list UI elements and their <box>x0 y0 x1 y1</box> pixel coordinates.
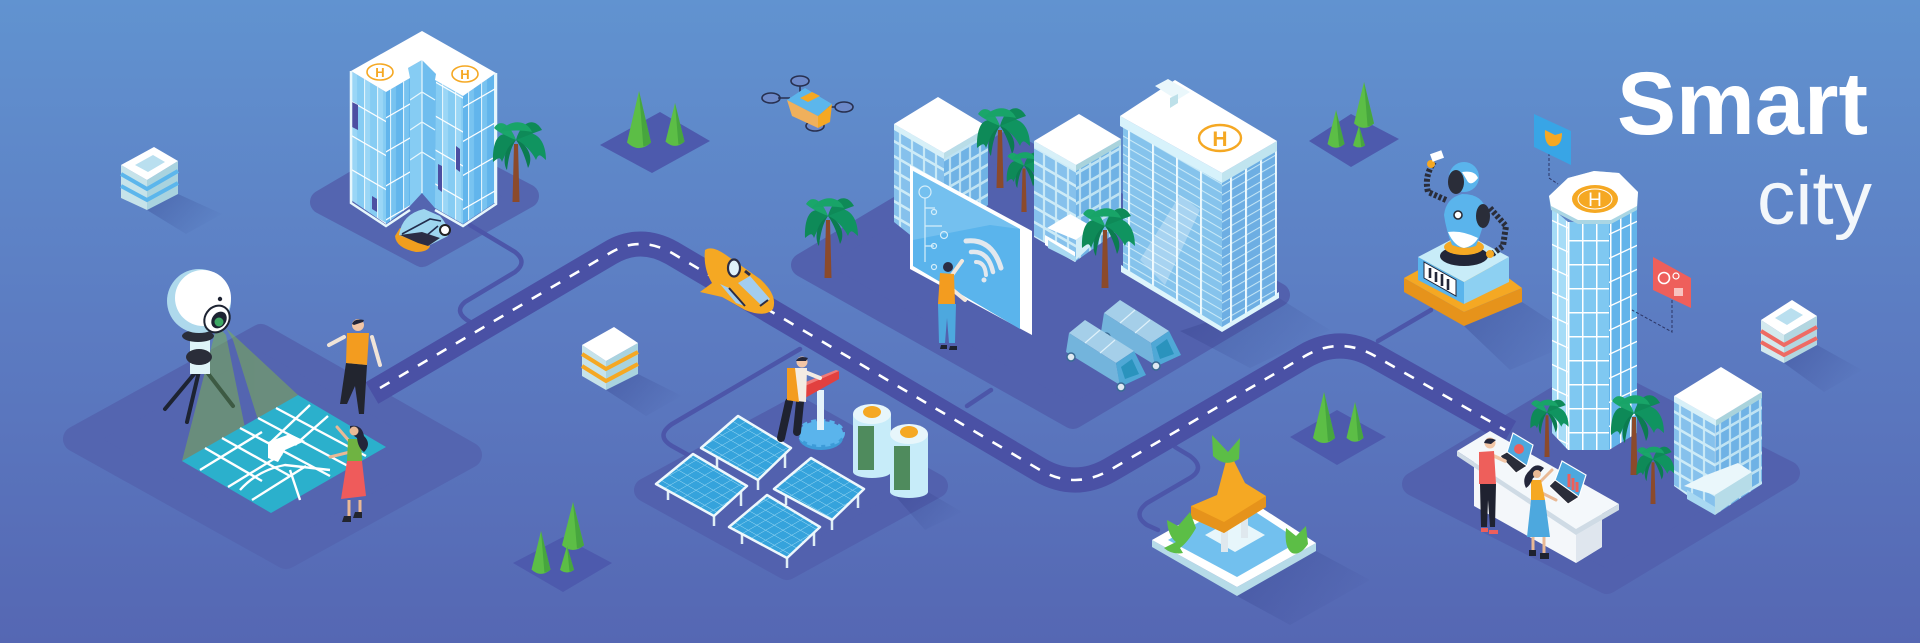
panel 3 <box>774 458 864 530</box>
person: solar technician <box>781 356 820 438</box>
wifi screen <box>910 165 1032 335</box>
plaza: central district <box>803 143 1278 417</box>
flying taxi <box>700 248 774 314</box>
tree patch: lower right <box>1290 392 1386 465</box>
laptop left <box>1500 433 1533 473</box>
cube: red <box>1761 300 1862 392</box>
orange roof <box>1191 461 1266 533</box>
torso <box>1444 194 1486 248</box>
connectors <box>460 225 1431 530</box>
helipad: twin tower left <box>367 64 393 80</box>
building: central left <box>894 97 988 262</box>
building: central middle <box>1034 114 1121 262</box>
palm: front of big office <box>1082 208 1135 288</box>
title: Smart: Smart <box>1617 53 1868 153</box>
tree patch: top left <box>600 91 710 173</box>
helipad: big office: H <box>1212 128 1228 151</box>
vans <box>1066 300 1181 391</box>
panel 1 <box>701 416 791 490</box>
cube: orange <box>582 327 682 416</box>
plant left <box>1164 512 1196 553</box>
annex <box>1684 463 1752 515</box>
helipad: twin tower right <box>452 66 478 82</box>
building: right <box>1674 367 1762 515</box>
head <box>1449 162 1479 192</box>
street map <box>182 395 386 513</box>
person: man at screen <box>938 261 965 350</box>
control panel <box>1424 262 1456 296</box>
plaza: twin tower <box>322 142 527 255</box>
helipad: tower <box>1572 185 1618 213</box>
palm: tower right <box>1611 395 1664 475</box>
palm: tower left <box>1530 400 1569 457</box>
arms <box>1427 162 1446 200</box>
base ring <box>1440 246 1488 266</box>
panel 4 <box>729 495 820 568</box>
person: man in red vest <box>1479 438 1505 534</box>
camera projection beam <box>182 325 298 461</box>
palm: left of screen <box>805 198 858 278</box>
tripod legs <box>165 367 233 422</box>
plant right <box>1286 526 1308 554</box>
palm: behind screen <box>977 108 1030 188</box>
tree patch: bottom left <box>513 502 612 592</box>
laptop right <box>1549 461 1586 504</box>
reception desk <box>1457 431 1619 563</box>
flag: shield <box>1534 114 1571 184</box>
plaza: solar field <box>646 408 936 568</box>
person: man in orange vest <box>329 319 380 414</box>
plaza: right office <box>1414 375 1788 582</box>
cube: blue <box>121 147 222 234</box>
helipad: twin tower right: H <box>460 67 470 82</box>
autonomous car <box>395 209 450 252</box>
batteries <box>853 404 928 498</box>
camera on tripod <box>165 269 235 422</box>
columns <box>1221 512 1228 552</box>
fountain pavilion <box>1152 435 1370 625</box>
screen menu icons <box>919 186 948 270</box>
leaves on top <box>1212 435 1240 463</box>
annex <box>1045 214 1093 262</box>
title: city: city <box>1757 156 1872 241</box>
plaza: camera and map <box>76 337 469 556</box>
title <box>1617 53 1872 241</box>
van: rear <box>1101 300 1181 370</box>
helipad: tower: H <box>1588 190 1602 211</box>
helipad: big office <box>1199 125 1241 151</box>
gear pedestal with red sign <box>799 370 843 450</box>
delivery drone <box>762 76 853 131</box>
battery 2 <box>890 424 928 498</box>
palm: behind screen small <box>1007 152 1046 212</box>
flag: gears <box>1632 257 1691 332</box>
solar panels <box>656 416 962 568</box>
palm: tower right small <box>1636 447 1675 504</box>
person: woman in blue dress <box>1524 465 1556 559</box>
tree patch: top right <box>1309 82 1399 167</box>
battery 1 <box>853 404 891 478</box>
robot on pedestal <box>1404 150 1580 370</box>
helipad: twin tower left: H <box>375 65 385 80</box>
round tower <box>1549 171 1638 450</box>
road <box>372 244 1510 480</box>
camera sphere <box>167 269 231 333</box>
twin tower building <box>351 31 496 226</box>
person: woman in red skirt <box>330 426 368 522</box>
building: big helipad office <box>1120 79 1330 368</box>
wifi symbol <box>966 241 1001 282</box>
van: front <box>1066 320 1146 391</box>
palm: twin tower <box>493 122 546 202</box>
panel 2 <box>656 454 747 526</box>
